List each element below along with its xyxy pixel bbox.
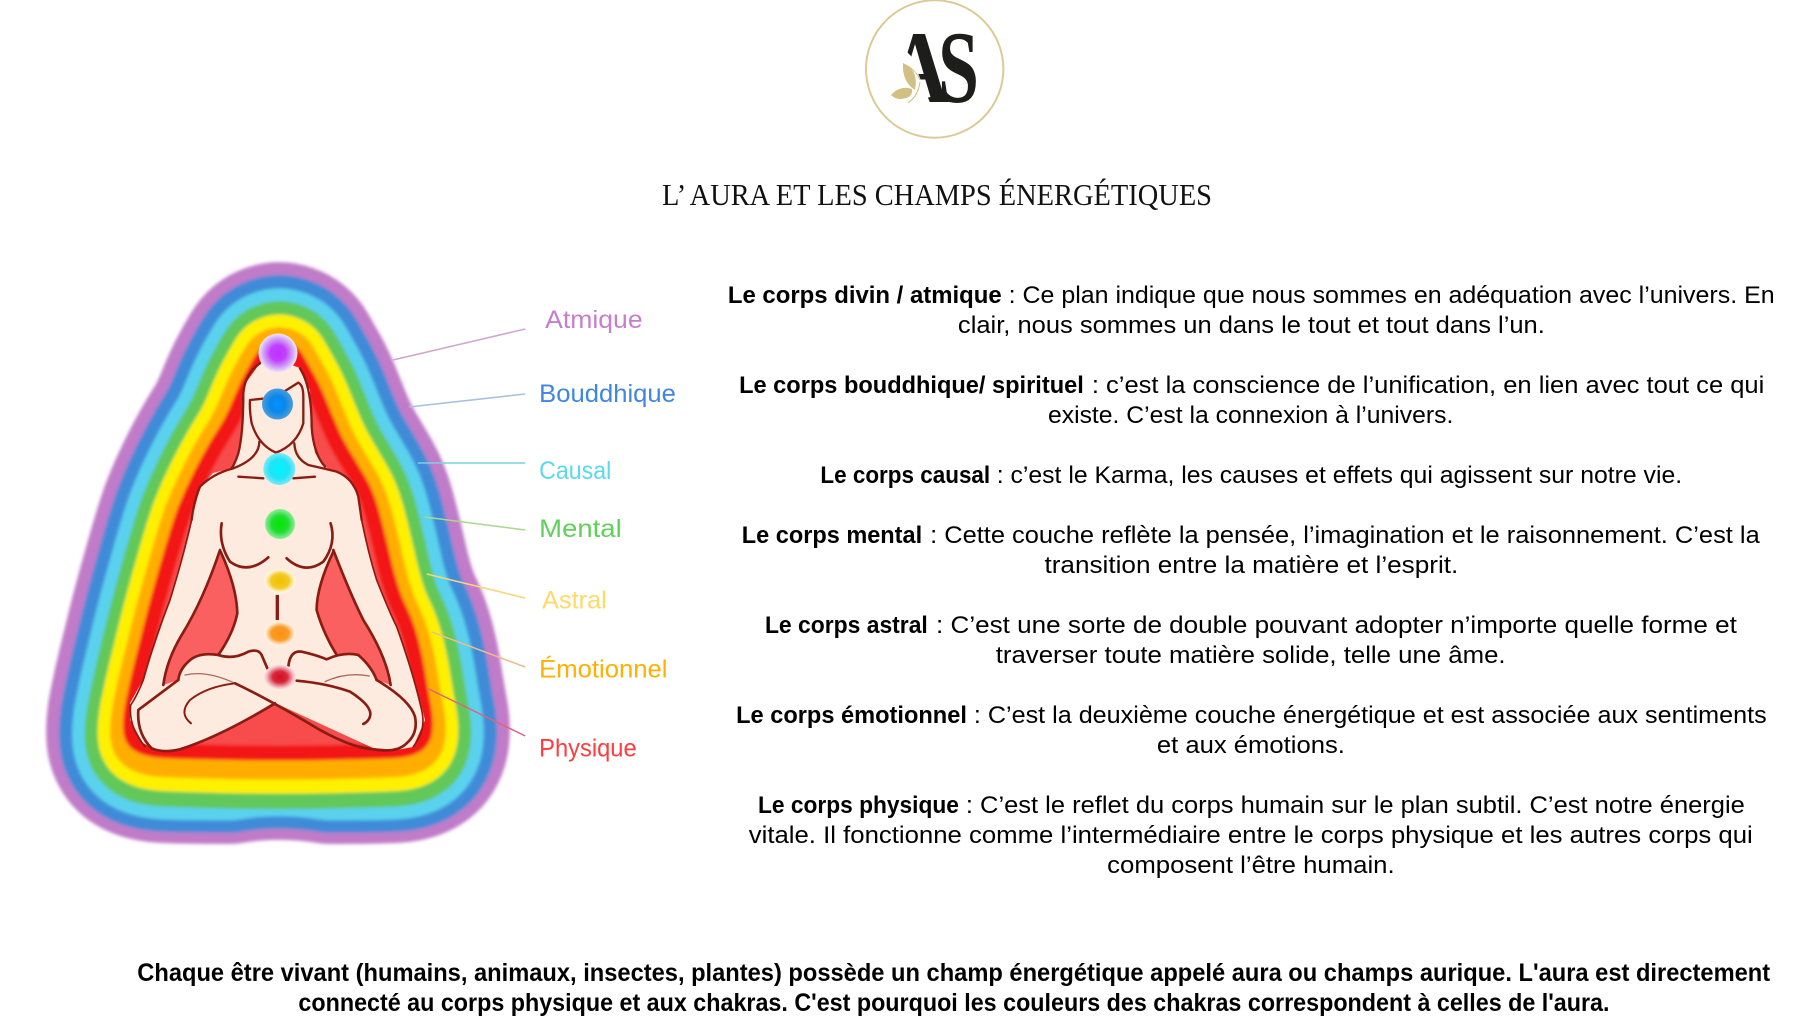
text block: corps physique (749, 792, 1753, 879)
text block: corps bouddhique: existe. C’est la connexion à l’univers. (1048, 402, 1453, 429)
label: Émotionnel (432, 632, 667, 684)
chakra: heart (265, 509, 295, 539)
text block: corps physique: : C’est le reflet du corps humain sur le plan subtil. C’est notre énergie (966, 792, 1745, 819)
label: Physique (427, 688, 637, 763)
label: Physique: Physique (539, 734, 637, 763)
text block: corps mental: Le corps mental (742, 522, 922, 549)
logo ring (866, 0, 1003, 138)
title: L’ AURA ET LES CHAMPS ÉNERGÉTIQUES (662, 177, 1212, 212)
text block: corps émotionnel: : C’est la deuxième couche énergétique et est associée aux sentiments (974, 702, 1767, 729)
footer statement (137, 959, 1770, 1017)
text block: corps causal: : c’est le Karma, les causes et effets qui agissent sur notre vie. (997, 462, 1682, 489)
chakra: sacral (264, 621, 296, 646)
text block: corps mental: transition entre la matière et l’esprit. (1044, 552, 1458, 579)
logo (866, 0, 1003, 138)
text block: corps astral: Le corps astral (765, 612, 928, 639)
footer statement: connecté au corps physique et aux chakras. C'est pourquoi les couleurs des chakras correspondent à celles de l'aura. (298, 989, 1610, 1017)
label: Causal: Causal (539, 457, 611, 485)
aura diagram (123, 334, 433, 770)
chakra: root (264, 664, 296, 690)
text block: corps physique: vitale. Il fonctionne comme l’intermédiaire entre le corps physique et les autres corps qui (749, 822, 1753, 849)
text block: corps émotionnel: et aux émotions. (1157, 732, 1345, 759)
text block: corps bouddhique (739, 372, 1764, 429)
text block: corps émotionnel: Le corps émotionnel (736, 702, 967, 729)
logo monogram: A (889, 11, 949, 125)
logo monogram: S (938, 11, 979, 125)
head and shoulders outlines (192, 363, 362, 520)
text block: corps émotionnel (736, 702, 1767, 759)
logo monogram (908, 34, 976, 103)
label: Astral (427, 574, 607, 615)
chakra: throat (263, 453, 295, 485)
footer statement: Chaque être vivant (humains, animaux, insectes, plantes) possède un champ énergétique appelé aura ou champs aurique. L'aura est directement (137, 959, 1770, 987)
text block: corps physique: Le corps physique (758, 792, 959, 819)
aura rings (123, 340, 433, 770)
body silhouette (130, 360, 425, 750)
text block: corps mental (742, 522, 1760, 579)
chakras (258, 334, 298, 690)
label: Astral: Astral (542, 586, 607, 615)
text block: corps mental: : Cette couche reflète la pensée, l’imagination et le raisonnement. C’est la (930, 522, 1760, 549)
text block: corps astral (765, 612, 1737, 669)
lower body outlines (130, 520, 423, 751)
text block: corps divin (728, 282, 1775, 339)
label: Émotionnel: Émotionnel (539, 654, 667, 684)
layer labels (393, 306, 676, 763)
text block: corps causal: Le corps causal (820, 462, 990, 489)
text block: corps bouddhique: : c’est la conscience de l’unification, en lien avec tout ce qui (1092, 372, 1764, 399)
text block: corps divin: Le corps divin / atmique (728, 282, 1002, 309)
label: Bouddhique: Bouddhique (539, 380, 676, 408)
logo butterfly (891, 63, 920, 103)
descriptions of the bodies (728, 282, 1775, 879)
text block: corps divin: : Ce plan indique que nous sommes en adéquation avec l’univers. En (1009, 282, 1775, 309)
chakra: crown (258, 334, 298, 372)
label: Mental: Mental (539, 515, 622, 543)
label: Atmique (393, 306, 643, 360)
label: Atmique: Atmique (545, 306, 643, 334)
text block: corps bouddhique: Le corps bouddhique/ spirituel (739, 372, 1084, 399)
text block: corps astral: traverser toute matière solide, telle une âme. (996, 642, 1506, 669)
chakra: solar plexus (264, 568, 296, 594)
label: Mental (425, 515, 622, 543)
chakra: third eye (262, 388, 293, 420)
text block: corps divin: clair, nous sommes un dans le tout et tout dans l’un. (958, 312, 1545, 339)
arm gaps (163, 552, 391, 685)
label: Bouddhique (409, 380, 676, 408)
text block: corps physique: composent l’être humain. (1107, 852, 1395, 879)
text block: corps astral: : C’est une sorte de double pouvant adopter n’importe quelle forme et (936, 612, 1737, 639)
